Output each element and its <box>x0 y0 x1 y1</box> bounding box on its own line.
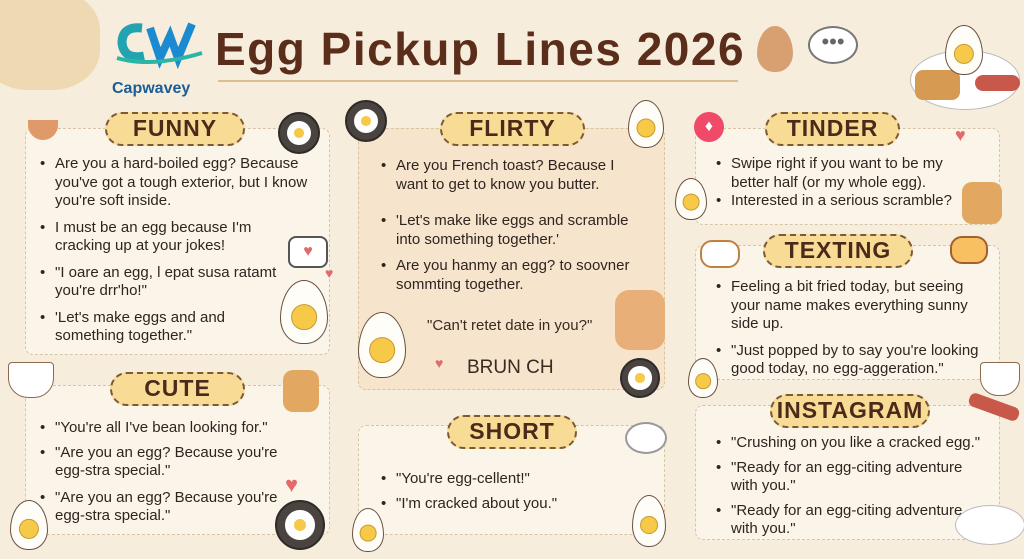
panel: tinder: better half (or my whole egg). <box>731 174 926 190</box>
heading: tinder: TINDER <box>787 115 878 141</box>
icon: tinder flame: ♦ <box>705 118 713 135</box>
panel: funny <box>25 128 330 355</box>
logo <box>112 22 202 97</box>
panel: instagram: with you." <box>731 477 796 494</box>
panel: texting: your name makes everything sunny <box>731 296 968 314</box>
panel: instagram: with you." <box>731 520 796 537</box>
panel: instagram: "Ready for an egg-citing adventure <box>731 502 962 518</box>
title: Egg Pickup Lines 2026 <box>215 23 745 75</box>
panel: flirty: Are you French toast? Because I <box>396 157 614 174</box>
heading: short: SHORT <box>469 418 555 444</box>
panel: flirty: "Can't retet date in you?" <box>427 317 592 334</box>
panel: texting: Feeling a bit fried today, but seeing <box>731 278 963 295</box>
panel: cute: egg-stra special." <box>55 462 170 479</box>
logo: Capwavey <box>112 80 190 97</box>
heading: funny: FUNNY <box>133 115 217 141</box>
panel: flirty <box>358 128 665 390</box>
panel: flirty: sommting together. <box>396 276 524 292</box>
hearts: ♥ <box>285 472 298 497</box>
text: ♥ <box>435 355 443 371</box>
breakfast plate top-right <box>910 25 1020 110</box>
panel: tinder <box>695 128 1000 225</box>
fried egg toast <box>615 290 665 350</box>
icon: tinder flame <box>694 112 724 142</box>
heading: cute <box>110 372 245 406</box>
panel: flirty: 'Let's make like eggs and scramble <box>396 212 629 229</box>
text: ♥ <box>955 125 966 145</box>
heading: texting <box>763 234 913 268</box>
panel: flirty: Are you hanmy an egg? to soovner <box>396 257 629 274</box>
panel: short: "You're egg-cellent!" <box>396 470 530 487</box>
text: ♥ <box>303 243 313 260</box>
panel: cute: egg-stra special." <box>55 507 170 524</box>
panel: funny: I must be an egg because I'm <box>55 218 251 236</box>
plate bottom right <box>955 505 1024 545</box>
chat bubbles <box>700 240 740 268</box>
panel: texting: "Just popped by to say you're looking <box>731 342 979 358</box>
icon: egg <box>757 26 793 72</box>
icon: cracked shell <box>28 120 58 140</box>
icon: speech bubble: ••• <box>821 29 845 54</box>
panel: tinder: Swipe right if you want to be my <box>731 155 943 172</box>
panel: texting: good today, no egg-aggeration." <box>731 360 944 377</box>
panel: flirty: into something together.' <box>396 230 559 248</box>
panel: funny: cracking up at your jokes! <box>55 237 225 254</box>
panel: texting: side up. <box>731 315 784 332</box>
decorative basket top-left <box>0 0 100 90</box>
bacon <box>967 392 1021 422</box>
panel: tinder: Interested in a serious scramble? <box>731 192 952 209</box>
egg characters <box>280 280 328 344</box>
panel: funny: you're drr'ho!" <box>55 282 147 299</box>
panel: instagram <box>695 405 1000 540</box>
heading: instagram: INSTAGRAM <box>777 397 923 423</box>
heading: texting: TEXTING <box>785 237 891 263</box>
heading: tinder <box>765 112 900 146</box>
icon: speech bubble <box>808 26 858 64</box>
panel: instagram: "Crushing on you like a cracked egg." <box>731 434 980 451</box>
panel: flirty: BRUN CH <box>467 357 554 378</box>
panel: funny: you're soft inside. <box>55 192 171 209</box>
panel: funny: 'Let's make eggs and and <box>55 308 225 326</box>
heading: flirty <box>440 112 585 146</box>
heading: short <box>447 415 577 449</box>
panel: funny: Are you a hard-boiled egg? Because <box>55 155 299 172</box>
panel: funny: something together." <box>55 327 192 344</box>
panel: instagram: "Ready for an egg-citing adventure <box>731 458 962 476</box>
panel: texting <box>695 245 1000 380</box>
panel: cute: "You're all I've bean looking for." <box>55 419 268 436</box>
panel: cute: "Are you an egg? Because you're <box>55 488 278 506</box>
panel: short <box>358 425 665 535</box>
panel: cute <box>25 385 330 535</box>
heading: cute: CUTE <box>144 375 211 401</box>
icon: pans <box>278 112 320 154</box>
panel: short: "I'm cracked about you." <box>396 494 557 512</box>
panel: funny: you've got a tough exterior, but I know <box>55 174 307 190</box>
coffee cups <box>8 362 54 398</box>
heading: funny <box>105 112 245 146</box>
panel: cute: "Are you an egg? Because you're <box>55 444 278 460</box>
text: ♥ <box>325 265 333 281</box>
panel: flirty: want to get to know you butter. <box>396 176 599 192</box>
heading: flirty: FLIRTY <box>469 115 556 141</box>
panel: funny: "I oare an egg, l epat susa ratamt <box>55 264 276 280</box>
